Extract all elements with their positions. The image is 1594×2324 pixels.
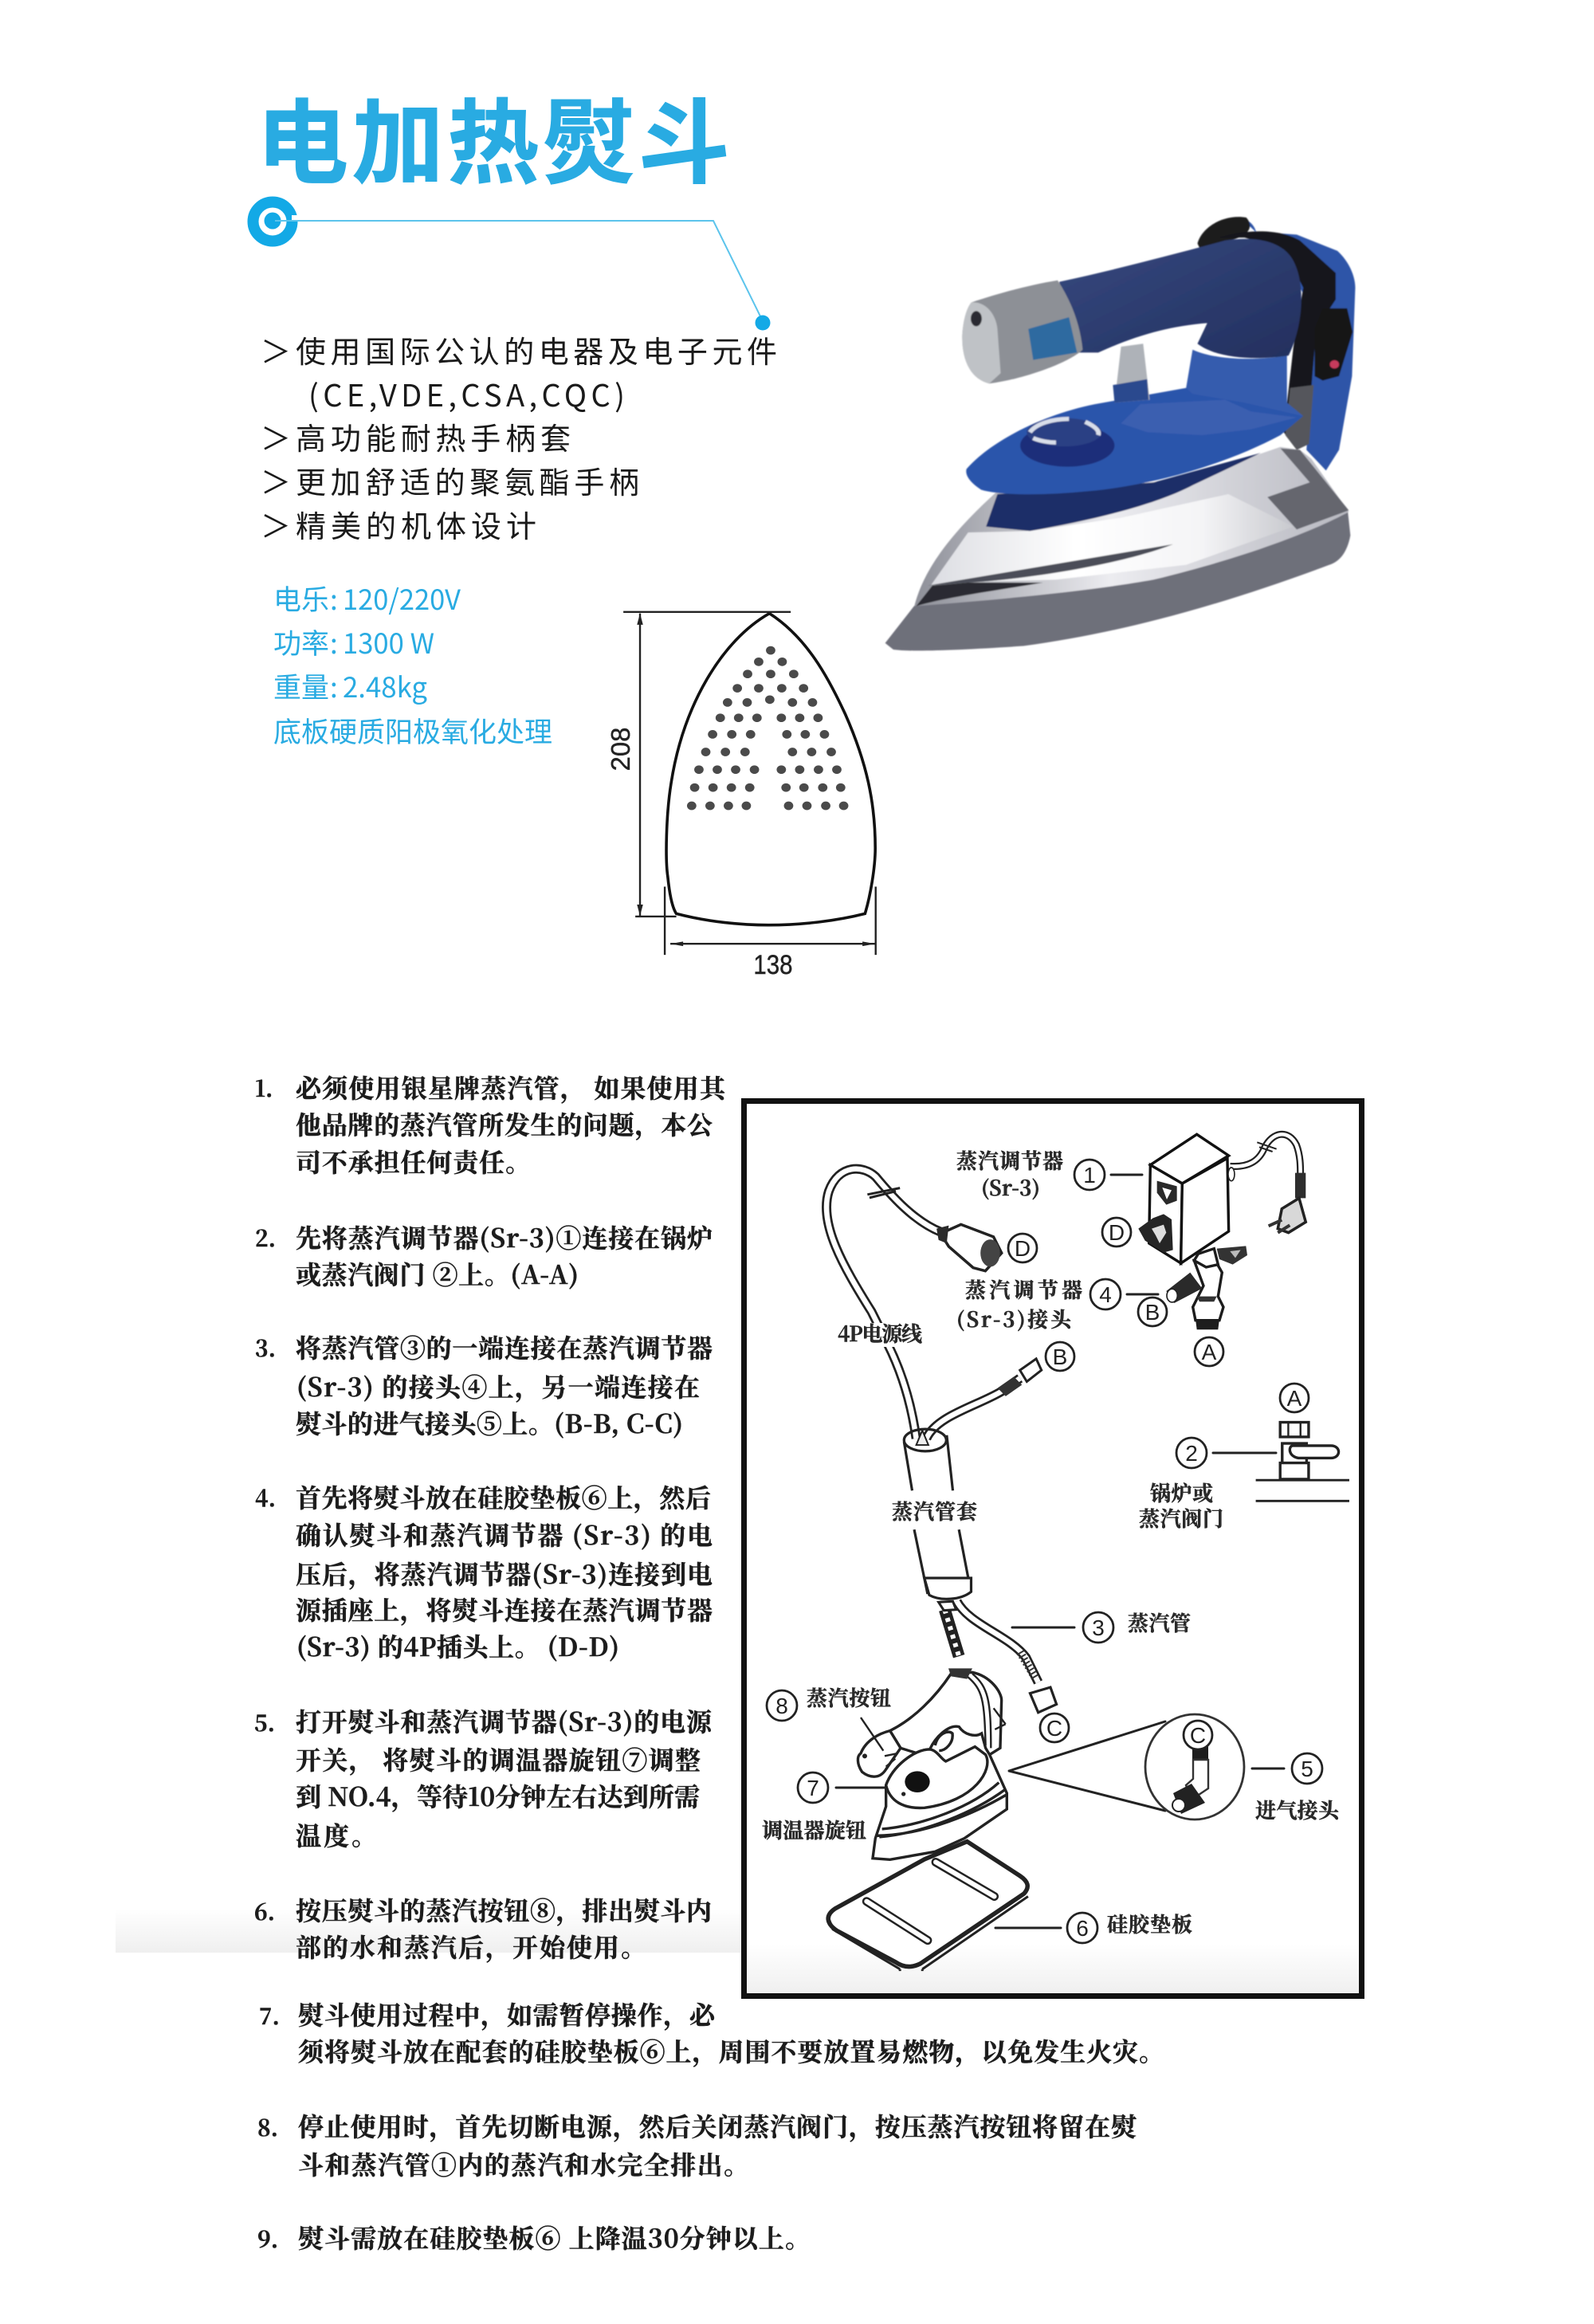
plate xyxy=(966,388,1303,494)
specifications: 1300 W xyxy=(343,622,434,662)
dark shoulder xyxy=(1267,449,1349,529)
step 5 xyxy=(254,1702,713,1853)
marker C in lens: C xyxy=(1190,1723,1206,1748)
sole xyxy=(885,511,1350,650)
specifications: 底板硬质阳极氧化处理 xyxy=(273,710,552,751)
instructions steps 7 to 9 xyxy=(257,1996,1164,2255)
diagram labels: 4P电源线 xyxy=(838,1318,922,1348)
diagram labels: 蒸汽管 xyxy=(1128,1608,1191,1637)
step 1: 司不承担任何责任。 xyxy=(296,1143,531,1180)
power cable and sleeve xyxy=(826,1169,1042,1594)
step 6: 按压熨斗的蒸汽按钮⑧，排出熨斗内 xyxy=(296,1891,712,1928)
knob xyxy=(1197,217,1250,255)
dimension height: 208 xyxy=(606,727,635,771)
step 5: 5. xyxy=(254,1706,275,1738)
reflection under plate xyxy=(986,453,1261,531)
step 5: 到 NO.4，等待10分钟左右达到所需 xyxy=(296,1777,700,1814)
product photo: steam iron xyxy=(885,217,1355,650)
steam regulator fitting xyxy=(1166,1246,1247,1329)
marker B on hose: B xyxy=(1053,1345,1067,1369)
specifications: 功率 xyxy=(273,622,329,662)
step 4 xyxy=(255,1478,713,1664)
specifications: : xyxy=(330,665,338,706)
step 3: (Sr-3) 的接头④上，另一端连接在 xyxy=(296,1368,700,1404)
step 2: 先将蒸汽调节器(Sr-3)①连接在锅炉 xyxy=(296,1219,713,1255)
step 9: 熨斗需放在硅胶垫板⑥ 上降温30分钟以上。 xyxy=(298,2219,811,2255)
feature list: ＞ xyxy=(261,328,291,371)
marker 7 xyxy=(798,1772,828,1803)
step 7 xyxy=(259,1996,1164,2069)
specifications: : xyxy=(330,578,338,618)
dimension width: 138 xyxy=(753,949,793,980)
decorative connector with ring and dot xyxy=(253,202,770,330)
diagram labels: 蒸汽调节器 xyxy=(956,1145,1063,1175)
marker 1 xyxy=(1074,1160,1105,1190)
step 4: 4. xyxy=(255,1482,276,1513)
grey cap xyxy=(962,281,1082,383)
specifications: : xyxy=(330,622,338,662)
feature list: ＞ xyxy=(261,458,291,502)
feature list: ＞ xyxy=(261,502,291,546)
step 7: 熨斗使用过程中，如需暂停操作，必 xyxy=(298,1996,717,2032)
marker 6: 6 xyxy=(1076,1916,1089,1941)
boiler valve xyxy=(1256,1423,1349,1501)
title: 电加热熨斗 xyxy=(257,70,730,202)
feature list: 使用国际公认的电器及电子元件 xyxy=(296,328,777,371)
marker B on hose xyxy=(1046,1342,1074,1371)
diagram labels: 蒸汽管套 xyxy=(892,1496,977,1525)
bright upper chrome xyxy=(931,494,1294,586)
step 5: 温度。 xyxy=(296,1816,377,1853)
step 8 xyxy=(257,2107,1137,2182)
marker 7: 7 xyxy=(807,1776,819,1800)
specifications xyxy=(273,578,552,751)
step 4: 首先将熨斗放在硅胶垫板⑥上，然后 xyxy=(296,1478,711,1515)
diagram labels: 蒸汽阀门 xyxy=(1139,1503,1223,1533)
diagram labels: 进气接头 xyxy=(1255,1795,1341,1824)
feature list: ＞ xyxy=(261,414,291,458)
marker A on valve xyxy=(1280,1384,1309,1412)
soleplate dimension drawing xyxy=(606,612,876,980)
marker C in lens xyxy=(1184,1721,1212,1749)
silicone pad xyxy=(828,1842,1028,1971)
marker B on fitting xyxy=(1138,1297,1167,1326)
diagram labels: (Sr-3)接头 xyxy=(956,1304,1073,1333)
diagram labels: 锅炉或 xyxy=(1150,1478,1213,1507)
step 2 xyxy=(255,1219,713,1292)
iron line drawing xyxy=(858,1668,1007,1859)
marker 1: 1 xyxy=(1083,1163,1096,1188)
diagram labels: 硅胶垫板 xyxy=(1107,1909,1192,1938)
callout lens with inlet connector xyxy=(1009,1714,1244,1820)
step 6: 部的水和蒸汽后，开始使用。 xyxy=(296,1928,646,1965)
step 9: 9. xyxy=(257,2223,278,2255)
feature list xyxy=(261,328,777,546)
marker C on hose: C xyxy=(1046,1716,1062,1741)
feature list: (CE,VDE,CSA,CQC) xyxy=(308,371,625,415)
step 3: 熨斗的进气接头⑤上。(B-B, C-C) xyxy=(296,1404,683,1441)
step 4: 压后，将蒸汽调节器(Sr-3)连接到电 xyxy=(296,1555,713,1592)
marker A on valve: A xyxy=(1287,1386,1302,1411)
step 1: 他品牌的蒸汽管所发生的问题，本公 xyxy=(296,1105,713,1142)
marker 6 xyxy=(1067,1913,1097,1943)
step 6 xyxy=(254,1891,712,1965)
rear blue panel xyxy=(1242,218,1355,470)
steam hose and connector xyxy=(925,1578,1057,1713)
step 8: 停止使用时，首先切断电源，然后关闭蒸汽阀门，按压蒸汽按钮将留在熨 xyxy=(298,2107,1137,2144)
marker A on fitting: A xyxy=(1202,1340,1217,1364)
diagram labels: 调温器旋钮 xyxy=(762,1815,866,1844)
callout markers xyxy=(767,1160,1322,1943)
step 4: 源插座上，将熨斗连接在蒸汽调节器 xyxy=(296,1591,713,1627)
marker B on fitting: B xyxy=(1145,1300,1160,1325)
step 6: 6. xyxy=(254,1895,275,1927)
specifications: 电乐 xyxy=(273,578,329,618)
chrome edge lines xyxy=(928,544,1173,586)
step 7: 7. xyxy=(259,2000,280,2032)
step 2: 或蒸汽阀门 ②上。(A-A) xyxy=(296,1255,579,1292)
marker 5 xyxy=(1292,1753,1322,1784)
specifications: 2.48kg xyxy=(343,665,427,706)
step 2: 2. xyxy=(255,1222,276,1254)
step 8: 斗和蒸汽管①内的蒸汽和水完全排出。 xyxy=(298,2145,749,2182)
marker D on cable: D xyxy=(1015,1236,1031,1261)
handle xyxy=(1059,239,1302,358)
diagram labels: 蒸汽调节器 xyxy=(965,1274,1082,1304)
marker 4: 4 xyxy=(1099,1282,1112,1307)
diagram labels: 蒸汽按钮 xyxy=(807,1682,891,1712)
steam regulator unit xyxy=(1138,1134,1305,1329)
marker A on fitting xyxy=(1195,1337,1223,1366)
dial xyxy=(1020,424,1114,467)
diagram labels xyxy=(762,1145,1341,1938)
marker 8 xyxy=(767,1690,797,1721)
chrome body xyxy=(914,447,1349,607)
marker D on regulator: D xyxy=(1109,1220,1125,1245)
specifications: 120/220V xyxy=(343,578,461,618)
rocker switch xyxy=(1314,308,1353,381)
marker 2 xyxy=(1176,1438,1207,1468)
step 3: 3. xyxy=(255,1332,276,1364)
step 3 xyxy=(255,1329,713,1441)
window xyxy=(1028,317,1077,360)
marker 3: 3 xyxy=(1092,1615,1105,1640)
diagram labels: (Sr-3) xyxy=(981,1172,1040,1202)
step 3: 将蒸汽管③的一端连接在蒸汽调节器 xyxy=(296,1329,713,1365)
step 1: 1. xyxy=(255,1072,273,1104)
step 4: (Sr-3) 的4P插头上。 (D-D) xyxy=(296,1627,619,1664)
marker 2: 2 xyxy=(1185,1441,1198,1466)
black strap xyxy=(1219,231,1336,449)
marker 8: 8 xyxy=(775,1694,788,1718)
panel: assembly diagram xyxy=(744,1101,1361,1996)
marker D on regulator xyxy=(1102,1218,1131,1246)
marker 3 xyxy=(1083,1612,1113,1643)
feature list: 精美的机体设计 xyxy=(296,502,536,546)
specifications: 重量 xyxy=(273,665,329,706)
step 4: 确认熨斗和蒸汽调节器 (Sr-3) 的电 xyxy=(296,1516,713,1553)
stem xyxy=(1114,343,1149,402)
step 5: 打开熨斗和蒸汽调节器(Sr-3)的电源 xyxy=(296,1702,713,1739)
marker D on cable xyxy=(1008,1234,1037,1262)
marker C on hose xyxy=(1040,1714,1069,1742)
step 7: 须将熨斗放在配套的硅胶垫板⑥上，周围不要放置易燃物，以免发生火灾。 xyxy=(298,2032,1164,2069)
step 1: 必须使用银星牌蒸汽管， 如果使用其 xyxy=(296,1069,728,1105)
leader lines xyxy=(836,1175,1284,1928)
step 8: 8. xyxy=(257,2111,278,2143)
marker 5: 5 xyxy=(1301,1757,1313,1781)
faint band behind step six xyxy=(116,1909,741,1953)
marker 4 xyxy=(1090,1279,1121,1309)
instructions steps 1 to 6 xyxy=(254,1069,728,1965)
feature list: 高功能耐热手柄套 xyxy=(296,414,571,458)
step 5: 开关， 将熨斗的调温器旋钮⑦调整 xyxy=(296,1741,701,1777)
collar xyxy=(1186,350,1303,416)
step 1 xyxy=(255,1069,728,1180)
feature list: 更加舒适的聚氨酯手柄 xyxy=(296,458,639,502)
